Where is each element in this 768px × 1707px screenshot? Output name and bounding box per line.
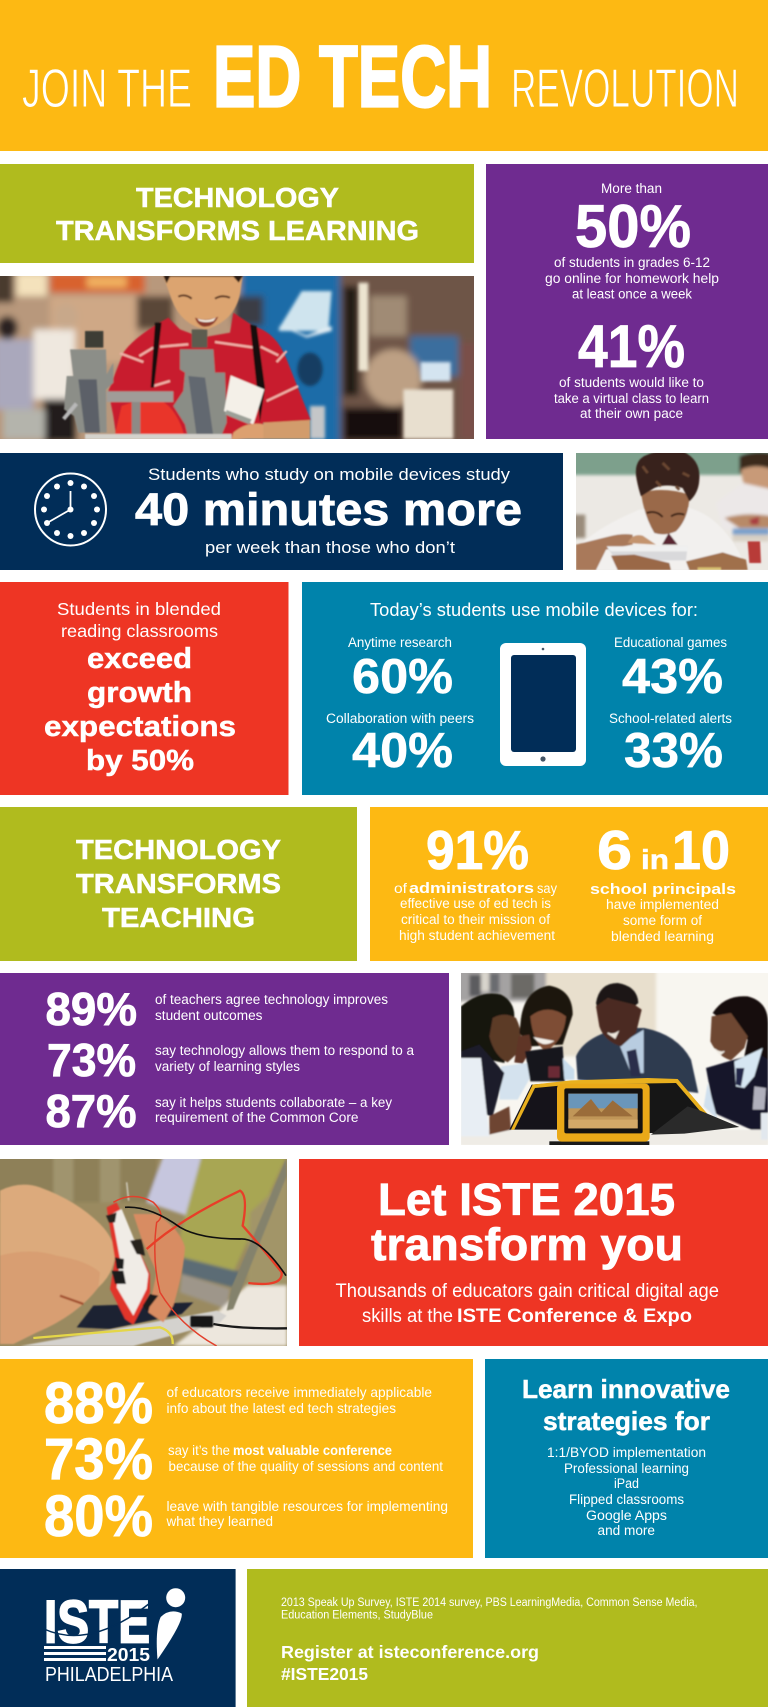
stat: 41 percent	[554, 313, 709, 421]
panel: blended reading classrooms: by 50%	[86, 745, 194, 777]
title: ED TECH	[213, 28, 492, 126]
stat: educational games: 43%	[622, 650, 723, 704]
panel: ISTE 2015 logo	[0, 1569, 236, 1707]
stat: 6 in 10 principals: 10	[672, 819, 730, 881]
stat: 88 percent: 88%	[44, 1371, 153, 1436]
stat: 73 percent: because of the quality of sessions and content	[168, 1458, 443, 1474]
stat: 87 percent: requirement of the Common Core	[155, 1110, 358, 1125]
logo: ISTE wordmark: PHILADELPHIA	[45, 1663, 173, 1686]
stat: 6 in 10 principals: some form of	[623, 913, 702, 928]
stat: 41 percent: take a virtual class to learn	[554, 391, 709, 406]
logo: person i mark	[157, 1588, 185, 1660]
stat: 6 in 10 principals	[590, 819, 736, 944]
icon: tablet	[500, 643, 586, 766]
panel: blended reading classrooms	[0, 582, 288, 795]
strategy list: 1:1/BYOD implementation	[547, 1445, 706, 1460]
text: 40 minutes more: per week than those who don’t	[205, 538, 455, 557]
panel: technology transforms teaching heading	[0, 807, 357, 961]
strategy list: Google Apps	[586, 1508, 667, 1523]
strategy list	[547, 1445, 706, 1538]
logo: ISTE wordmark: ISTE	[44, 1588, 150, 1656]
stat: 91 percent administrators: effective use of ed tech is	[400, 896, 551, 911]
stat: 41 percent: 41%	[578, 313, 685, 380]
stat: 91 percent administrators: of	[394, 881, 407, 896]
call to action: #ISTE2015	[281, 1664, 368, 1684]
stat: educational games	[614, 635, 727, 704]
stat: anytime research: 60%	[352, 650, 453, 704]
stat: 89 percent: 89%	[46, 983, 137, 1035]
stat: 50 percent: go online for homework help	[545, 271, 719, 286]
stat: 73 percent: 73%	[44, 1427, 153, 1492]
stat: 91 percent administrators: high student achievement	[399, 928, 555, 943]
stat: collaboration with peers	[326, 711, 474, 778]
stat: 91 percent administrators	[394, 819, 557, 943]
stat: 80 percent	[44, 1484, 448, 1549]
stat: 73 percent: say technology allows them to respond to a	[155, 1043, 414, 1058]
stat: 73 percent: variety of learning styles	[155, 1059, 300, 1074]
stat: 88 percent	[44, 1371, 432, 1436]
panel: learn innovative strategies	[485, 1359, 768, 1558]
heading: Learn innovative	[522, 1374, 730, 1404]
panel: technology transforms learning heading: TRANSFORMS LEARNING	[56, 215, 419, 246]
heading	[522, 1374, 730, 1436]
stat: 73 percent	[47, 1034, 414, 1086]
sources: 2013 Speak Up Survey, ISTE 2014 survey, PBS LearningMedia, Common Sense Media,	[281, 1597, 698, 1609]
panel: blended reading classrooms: growth	[87, 677, 192, 709]
sources: Education Elements, StudyBlue	[281, 1610, 433, 1622]
icon: clock	[35, 474, 106, 546]
stat: 73 percent: 73%	[47, 1034, 136, 1086]
panel: student online statistics	[486, 164, 768, 439]
panel: educator statistics	[0, 1359, 473, 1558]
stat: 41 percent: of students would like to	[559, 375, 704, 390]
photo: boy using tablet	[576, 453, 768, 570]
panel: teacher statistics	[0, 973, 449, 1145]
description: skills at the	[362, 1306, 453, 1327]
stat: 88 percent: of educators receive immediately applicable	[166, 1384, 432, 1400]
stat: 6 in 10 principals: have implemented	[606, 897, 719, 912]
stat: 6 in 10 principals: in	[641, 844, 669, 875]
text: 40 minutes more: 40 minutes more	[135, 484, 522, 535]
heading: Today’s students use mobile devices for:	[370, 600, 698, 620]
stat: 80 percent: leave with tangible resources for implementing	[166, 1498, 448, 1514]
heading: strategies for	[543, 1406, 710, 1436]
logo: ISTE wordmark: 2015	[107, 1644, 150, 1665]
panel: technology transforms teaching heading: TRANSFORMS	[76, 868, 281, 899]
stat: school-related alerts: School-related alerts	[609, 711, 732, 726]
stat: 80 percent: what they learned	[166, 1513, 273, 1529]
stat: 50 percent: 50%	[575, 193, 691, 260]
panel: technology transforms learning heading: TECHNOLOGY	[136, 182, 339, 213]
stat: collaboration with peers: 40%	[352, 724, 453, 778]
panel: blended reading classrooms: reading classrooms	[61, 621, 218, 641]
stat: 87 percent	[46, 1085, 392, 1137]
photo: students and teacher with tablets	[461, 973, 768, 1145]
stat: anytime research: Anytime research	[348, 635, 452, 650]
panel: administrators and principals	[370, 807, 768, 961]
stat: 73 percent	[44, 1427, 443, 1492]
stat: 6 in 10 principals: 6	[597, 819, 632, 881]
sources	[281, 1597, 698, 1622]
stat: 80 percent: 80%	[44, 1484, 153, 1549]
headline	[371, 1174, 683, 1270]
stat: 50 percent: at least once a week	[572, 286, 692, 302]
panel: technology transforms teaching heading: TECHNOLOGY	[76, 834, 281, 865]
stat: 87 percent: say it helps students collaborate – a key	[155, 1095, 392, 1110]
stat: 91 percent administrators: critical to their mission of	[401, 912, 550, 927]
panel: blended reading classrooms: exceed	[87, 643, 192, 675]
strategy list: Professional learning	[564, 1461, 689, 1476]
stat: 50 percent	[545, 181, 719, 302]
stat: 87 percent: 87%	[46, 1085, 136, 1137]
logo: ISTE wordmark	[44, 1588, 173, 1686]
panel: technology transforms learning heading	[0, 164, 474, 263]
headline: Let ISTE 2015	[378, 1174, 675, 1225]
strategy list: and more	[598, 1523, 655, 1538]
headline: transform you	[371, 1219, 683, 1270]
stat: 89 percent	[46, 983, 388, 1035]
description: Thousands of educators gain critical digital age	[336, 1281, 719, 1302]
panel: 40 minutes more	[0, 453, 563, 570]
panel: mobile device usage	[302, 582, 768, 795]
panel: sources and registration	[247, 1569, 768, 1707]
stat: 89 percent: student outcomes	[155, 1008, 263, 1023]
photo: hand holding circuit board	[0, 1159, 287, 1346]
stat: 91 percent administrators: say	[537, 881, 557, 896]
stat: 50 percent: More than	[601, 181, 662, 196]
panel: blended reading classrooms: expectations	[44, 711, 236, 743]
call to action: Register at isteconference.org	[281, 1642, 539, 1662]
stat: 6 in 10 principals: school principals	[590, 881, 736, 898]
stat: 91 percent administrators: administrators	[409, 880, 534, 897]
stat: collaboration with peers: Collaboration with peers	[326, 711, 474, 726]
title	[22, 28, 739, 126]
stat: 91 percent administrators: 91%	[426, 819, 529, 881]
photo: boy with robot	[0, 276, 474, 439]
stat: 6 in 10 principals: blended learning	[611, 929, 714, 944]
stat: 41 percent: at their own pace	[580, 406, 683, 421]
title: JOIN THE	[22, 58, 192, 119]
description: ISTE Conference & Expo	[457, 1306, 692, 1327]
stat: school-related alerts: 33%	[624, 724, 723, 778]
strategy list: iPad	[614, 1476, 639, 1491]
stat: 89 percent: of teachers agree technology improves	[155, 992, 388, 1007]
panel: blended reading classrooms: Students in blended	[57, 599, 221, 619]
header banner	[0, 0, 768, 151]
panel: let ISTE 2015 transform you	[299, 1159, 768, 1346]
description	[336, 1281, 719, 1327]
stat: 88 percent: info about the latest ed tech strategies	[166, 1400, 396, 1416]
call to action	[281, 1642, 539, 1684]
stat: educational games: Educational games	[614, 635, 727, 650]
panel: technology transforms teaching heading: TEACHING	[102, 902, 255, 933]
text: 40 minutes more	[135, 465, 522, 557]
strategy list: Flipped classrooms	[569, 1492, 684, 1507]
stat: 73 percent: most valuable conference	[233, 1442, 392, 1458]
stat: 50 percent: of students in grades 6-12	[554, 255, 710, 270]
stat: 73 percent: say it’s the	[168, 1442, 230, 1458]
text: 40 minutes more: Students who study on mobile devices study	[148, 465, 511, 484]
stat: school-related alerts	[609, 711, 732, 778]
